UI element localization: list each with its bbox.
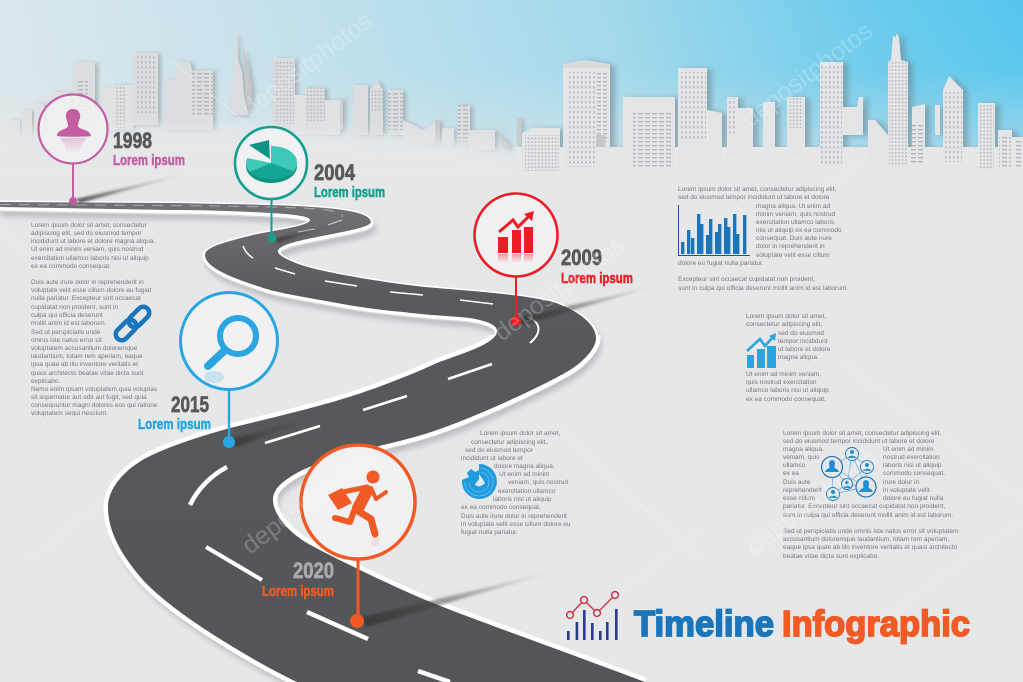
text block: lower right: eaque ipsa quae ab illo inventore veritatis et quasi architecto: [783, 544, 958, 551]
text block: middle right: Lorem ipsum dolor sit amet,: [746, 313, 826, 320]
text block: left: incididunt ut labore et dolore magna aliqua.: [31, 238, 156, 245]
text block: left: [31, 222, 158, 417]
text block: lower right: reprehenderit: [783, 487, 822, 494]
text block: middle right: Ut enim ad minim veniam,: [746, 371, 821, 378]
text block: centre: sed do eiusmod tempor: [465, 447, 534, 454]
text block: left: Nemo enim ipsam voluptatem quia voluptas: [31, 386, 158, 393]
text block: lower right: Ut enim ad minim: [883, 446, 934, 453]
text block: left: exercitation ullamco laboris nisi ut aliquip: [31, 255, 149, 262]
pin 2020: [301, 445, 415, 628]
text block: centre: Duis aute irure dolor in reprehenderit: [461, 513, 567, 520]
skyline: left: [8, 33, 521, 163]
watermark: depositphotos: [489, 231, 630, 347]
icon: people network: [822, 448, 876, 500]
text block: left: explicabo.: [31, 378, 60, 385]
text block: top right with bar chart: exercitation ullamco laboris: [756, 219, 835, 226]
text block: middle right: ullamco laboris nisi ut aliquip: [746, 387, 829, 394]
text block: left: laudantium, totam rem aperiam, eaque: [31, 353, 143, 360]
text block: lower right: ex ea: [783, 470, 799, 477]
text block: centre: incididunt ut labore et: [461, 455, 523, 462]
label 2020: Lorem ipsum: [262, 583, 334, 600]
logo icon: chart: [567, 592, 618, 640]
label 2020: [262, 558, 334, 600]
text block: left: Sed ut perspiciatis unde: [31, 329, 101, 336]
text block: middle right: tempor incididunt: [778, 338, 828, 345]
label 2004: Lorem ipsum: [314, 184, 385, 201]
sky: [0, 0, 1023, 176]
text block: top right with bar chart: voluptate velit esse cillum: [756, 252, 830, 259]
skyline base fade: [0, 128, 530, 195]
text block: lower right: accusantium doloremque laudantium, totam rem aperiam,: [783, 536, 949, 543]
text block: lower right: in voluptate velit: [883, 487, 930, 494]
icon: running man: [328, 470, 386, 546]
text block: left: nulla pariatur. Excepteur sint occaecat: [31, 295, 141, 302]
icon: pie chart: [246, 140, 297, 183]
text block: centre: consectetur adipiscing elit,: [471, 439, 547, 446]
pin 2015: [180, 292, 278, 448]
watermark: depositphotos: [237, 7, 378, 123]
text block: centre: Lorem ipsum dolor sit amet,: [480, 430, 560, 437]
text block: top right with bar chart: nisi ut aliquip ex ea commodo: [756, 227, 842, 234]
text block: lower right: laboris nisi ut aliquip: [883, 462, 942, 469]
text block: left: Duis aute irure dolor in reprehenderit in: [31, 279, 144, 286]
icon: chain link: [113, 304, 152, 343]
pin 2004: [235, 127, 307, 242]
road: [0, 202, 648, 682]
bar chart icon: [678, 205, 750, 256]
label 2015: [138, 392, 211, 433]
watermark: depositphotos: [742, 445, 883, 561]
text block: middle right: [746, 313, 831, 403]
text block: lower right: magna aliqua.: [783, 446, 824, 453]
label 1998: Lorem ipsum: [113, 152, 185, 169]
label 2015: 2015: [171, 392, 209, 417]
skyline: right: [515, 33, 1023, 175]
text block: lower right: irure dolor in: [883, 479, 920, 486]
text block: centre: laboris nisi ut aliquip: [493, 496, 552, 503]
label 2015: Lorem ipsum: [138, 416, 211, 433]
watermark: [237, 7, 883, 561]
label 2004: [314, 160, 385, 201]
icon: radial chart: [462, 464, 497, 499]
text block: top right with bar chart: dolor in reprehenderit in: [756, 243, 825, 250]
text block: centre: [461, 430, 571, 536]
text block: lower right: sed do eiusmod tempor incididunt ut labore et dolore: [783, 438, 935, 445]
title: Infographic: [782, 603, 970, 644]
icon: magnifier: [204, 318, 256, 383]
text block: left: culpa qui officia deserunt: [31, 312, 103, 319]
text block: middle right: magna aliqua.: [778, 354, 819, 361]
text block: lower right: esse cillum: [783, 495, 815, 502]
text block: centre: veniam, quis nostrud: [508, 479, 568, 486]
label 1998: [113, 128, 185, 169]
text block: left: Ut enim ad minim veniam, quis nostrud: [31, 246, 144, 253]
text block: middle right: quis nostrud exercitation: [746, 379, 817, 386]
text block: lower right: veniam, quis: [783, 454, 820, 461]
text block: lower right: ullamco: [783, 462, 806, 469]
watermark: depositphotos: [237, 444, 378, 560]
text block: top right with bar chart: Lorem ipsum dolor sit amet, consectetur adipiscing elit,: [678, 186, 836, 193]
text block: lower right: pariatur. Excepteur sint occaecat cupidatat non proident,: [783, 503, 945, 510]
text block: centre: fugiat nulla pariatur.: [461, 529, 518, 536]
watermark: depositphotos: [737, 17, 878, 133]
text block: left: mollit anim id est laborum.: [31, 320, 107, 327]
text block: lower right: dolore eu fugiat nulla: [883, 495, 944, 502]
title: Timeline: [634, 603, 774, 644]
text block: left: voluptatem accusantium doloremque: [31, 345, 138, 352]
label 2004: 2004: [314, 160, 356, 185]
text block: left: ex ea commodo consequat.: [31, 263, 111, 270]
text block: left: Lorem ipsum dolor sit amet, consectetur: [31, 222, 147, 229]
text block: left: sit aspernatur aut odit aut fugit, sed quia: [31, 394, 147, 401]
text block: left: consequuntur magni dolores eos qui ratione: [31, 402, 158, 409]
icon: small rising bars: [747, 333, 776, 368]
text block: lower right: beatae vitae dicta sunt explicabo.: [783, 553, 879, 560]
text block: middle right: ut labore et dolore: [778, 346, 831, 353]
text block: lower right: nostrud exercitation: [883, 454, 940, 461]
text block: left: voluptatem sequi nesciunt.: [31, 410, 108, 417]
text block: left: quasi architecto beatae vitae dicta sunt: [31, 370, 144, 377]
text block: centre: ex ea commodo consequat.: [461, 504, 541, 511]
skyline windows: [525, 60, 1023, 171]
text block: middle right: sed do eiusmod: [778, 330, 824, 337]
text block: left: ipsa quae ab illo inventore veritatis et: [31, 361, 138, 368]
text block: top right with bar chart: sunt in culpa qui officia deserunt mollit anim id est laborum.: [678, 285, 848, 292]
text block: top right with bar chart: dolore eu fugiat nulla pariatur.: [678, 260, 764, 267]
text block: centre: in voluptate velit esse cillum dolore eu: [461, 521, 571, 528]
label 2009: Lorem ipsum: [561, 270, 633, 287]
text block: centre: dolore magna aliqua.: [494, 463, 555, 470]
text block: left: voluptate velit esse cillum dolore eu fugiat: [31, 287, 152, 294]
icon: person: [57, 109, 91, 154]
pin shadows: [76, 173, 660, 627]
label 1998: 1998: [113, 128, 152, 153]
text block: lower right: [783, 430, 959, 560]
text block: top right with bar chart: [678, 186, 848, 292]
label 2009: 2009: [561, 245, 602, 270]
road lane markings: [0, 204, 538, 682]
text block: lower right: Lorem ipsum dolor sit amet, consectetur adipiscing elit,: [783, 430, 941, 437]
text block: left: adipiscing elit, sed do eiusmod tempor: [31, 230, 142, 237]
text block: lower right: sunt in culpa qui officia deserunt mollit anim id est laborum.: [783, 512, 953, 519]
text block: centre: exercitation ullamco: [498, 488, 556, 495]
text block: top right with bar chart: consequat. Duis aute irure: [756, 235, 832, 242]
text block: centre: Ut enim ad minim: [499, 471, 550, 478]
text block: left: cupidatat non proident, sunt in: [31, 304, 118, 311]
pin 2009: [474, 194, 558, 326]
title: [634, 603, 970, 644]
text block: top right with bar chart: sed do eiusmod tempor incididunt ut labore et dolore: [678, 194, 830, 201]
text block: top right with bar chart: magna aliqua. Ut enim ad: [756, 203, 830, 210]
text block: middle right: ex ea commodo consequat.: [746, 396, 826, 403]
text block: lower right: Sed ut perspiciatis unde omnis iste natus error sit voluptatem: [783, 528, 959, 535]
icon: rising bars: [498, 211, 534, 263]
pin 1998: [38, 94, 108, 205]
label 2020: 2020: [293, 558, 334, 583]
text block: top right with bar chart: minim veniam, quis nostrud: [756, 211, 835, 218]
text block: lower right: Duis aute: [783, 479, 811, 486]
text block: middle right: consectetur adipiscing elit,: [746, 321, 822, 328]
text block: left: omnis iste natus error sit: [31, 337, 102, 344]
text block: top right with bar chart: Excepteur sint occaecat cupidatat non proident,: [678, 276, 815, 283]
label 2009: [561, 245, 633, 287]
text block: lower right: commodo consequat.: [883, 470, 945, 477]
